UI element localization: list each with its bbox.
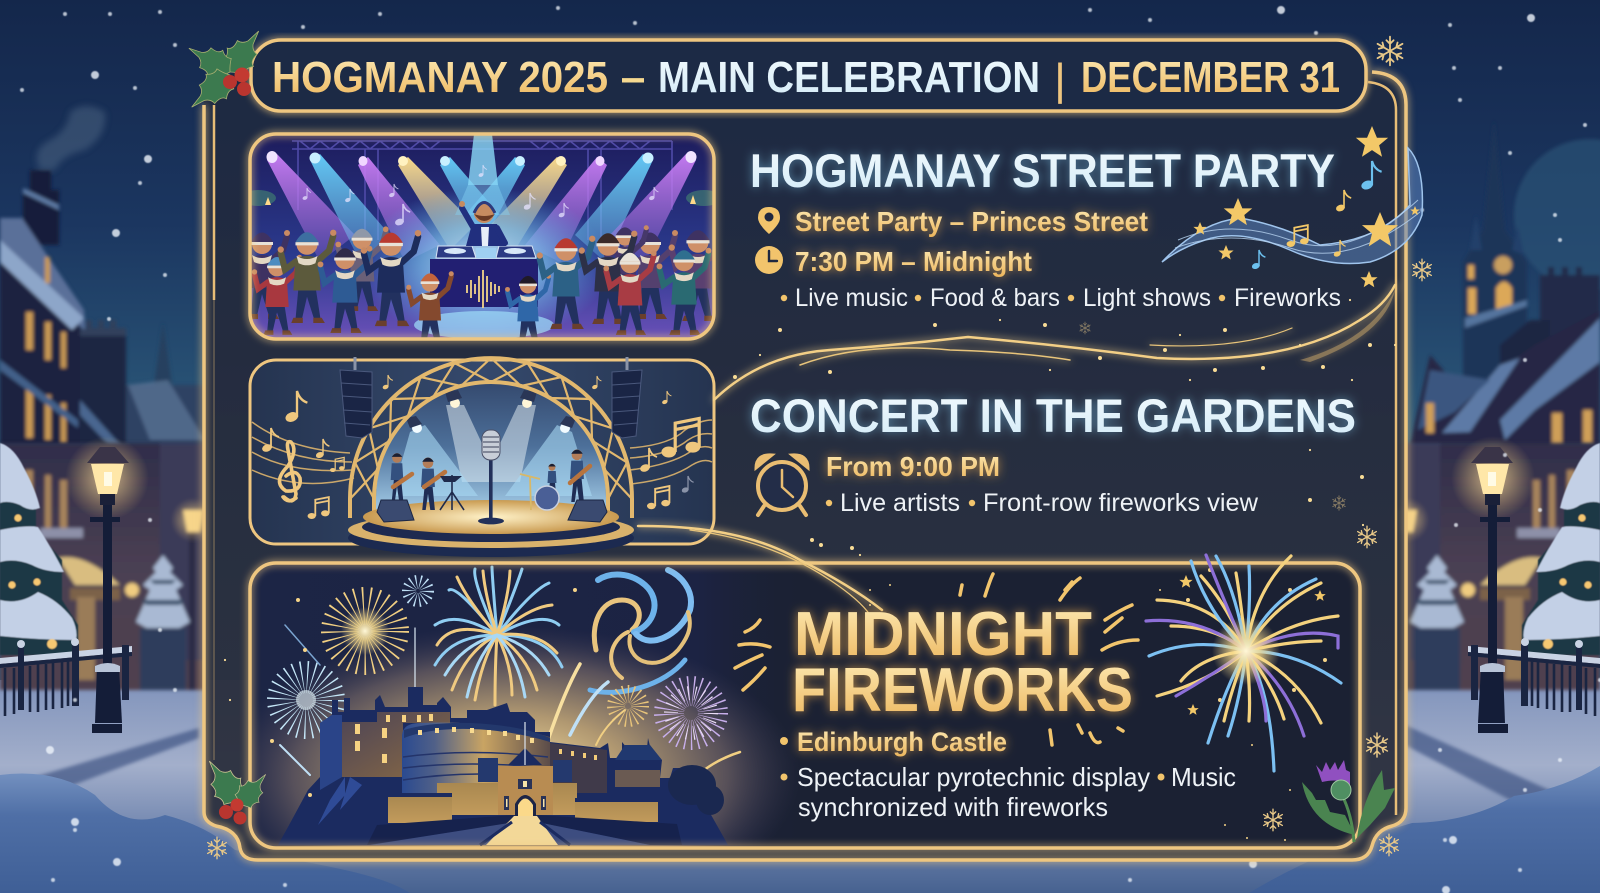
time text: 7:30 PM – Midnight: [795, 246, 1032, 277]
right snow mound: [1249, 766, 1600, 893]
light beams: [267, 134, 696, 343]
title text: DECEMBER 31: [1081, 53, 1340, 102]
location text: Street Party – Princes Street: [795, 206, 1148, 237]
ribbon notes: [1287, 225, 1308, 247]
truss: [350, 358, 632, 518]
castle: [278, 687, 728, 845]
thistle: [1302, 760, 1395, 842]
snowy ground: [0, 680, 1600, 893]
castle silhouette: [278, 687, 728, 845]
speaker stacks: [340, 357, 642, 438]
purple burst: [669, 691, 713, 735]
ramparts and road: [367, 815, 515, 845]
spotlight lamps: [266, 151, 696, 166]
heading midnight fireworks: [792, 600, 1133, 725]
left snow mound: [0, 774, 410, 893]
gold rays around midnight title: [735, 574, 1138, 745]
firework small stars: [1179, 575, 1326, 715]
right townscape: [1410, 120, 1600, 450]
concert features: [826, 489, 1259, 517]
icon: alarm clock: [756, 455, 808, 515]
concert features: Front-row fireworks view: [983, 489, 1259, 517]
panel 3 border: [250, 563, 1360, 848]
snowflake top right: [1376, 37, 1404, 65]
lower walls: [388, 796, 658, 823]
rising rockets: [280, 625, 740, 775]
music ribbon: [1162, 126, 1422, 287]
treble clef: [279, 442, 300, 501]
ribbon stars: [1193, 126, 1420, 287]
spot lamps: [406, 390, 576, 433]
small blue burst: [409, 582, 427, 600]
smoke: [37, 106, 105, 170]
street party features: [781, 284, 1341, 312]
gold burst: [340, 606, 390, 656]
stage platform: [348, 500, 634, 557]
holly top left: [181, 22, 272, 119]
band: [391, 450, 590, 510]
heading concert: CONCERT IN THE GARDENS: [750, 389, 1356, 442]
big firework right: [1146, 555, 1341, 771]
concert time text: From 9:00 PM: [826, 451, 1000, 482]
main panel frame: [204, 72, 1406, 860]
heading midnight fireworks: FIREWORKS: [792, 656, 1133, 725]
left street with tree, fence and lamp: [0, 436, 215, 733]
gold snowflakes: [206, 259, 1433, 859]
title text: [272, 53, 1340, 105]
gatehouse: [437, 783, 577, 815]
torches: [240, 190, 722, 206]
small gold burst: [616, 694, 640, 718]
title text: —: [622, 53, 644, 102]
white blue burst: [283, 677, 329, 723]
dancers: [252, 230, 711, 347]
floating notes: [302, 165, 658, 227]
stage arch: [350, 358, 632, 518]
fireworks description: synchronized with fireworks: [798, 792, 1108, 822]
blue and gold burst: [435, 567, 562, 705]
icon: location pin: [758, 207, 780, 234]
panel 1 border: [250, 134, 714, 339]
panel 3 midnight fireworks: [242, 555, 1368, 856]
left townscape: [0, 106, 210, 462]
gold sparkle dust: [272, 570, 1325, 840]
right house: [615, 770, 660, 787]
gold sparkles: [225, 300, 1395, 700]
panel 1 street party illustration: [234, 134, 727, 347]
gold swoosh between sections: [714, 285, 1395, 400]
street party features: Fireworks: [1234, 284, 1341, 312]
music notes: [261, 375, 700, 519]
curtain wall: [550, 743, 607, 793]
icon: clock: [755, 246, 783, 274]
stage monitors: [377, 500, 607, 522]
back crowd: [234, 225, 727, 321]
street party features: Light shows: [1083, 284, 1211, 312]
DJ: [459, 201, 506, 246]
title text: MAIN CELEBRATION: [658, 53, 1040, 102]
panel 2 concert illustration: [250, 357, 714, 557]
heading street party: HOGMANAY STREET PARTY: [750, 144, 1335, 197]
fireworks description: Spectacular pyrotechnic display: [797, 762, 1150, 792]
gold swoosh to fireworks: [638, 526, 882, 615]
title banner: [251, 40, 1366, 111]
heading midnight fireworks: MIDNIGHT: [794, 600, 1092, 669]
right street with tree, fence and lamp: [1385, 436, 1600, 733]
swirl burst: [590, 570, 691, 692]
DJ booth: [430, 246, 538, 308]
trees by castle: [668, 765, 716, 805]
truss: [292, 141, 672, 240]
round battery: [402, 723, 550, 795]
fireworks description: Music: [1171, 762, 1236, 792]
microphone: [478, 430, 504, 524]
title text: HOGMANAY 2025: [272, 53, 608, 102]
music staves: [252, 420, 712, 484]
street party features: Live music: [795, 284, 908, 312]
fireworks description: [780, 762, 1236, 822]
holly bottom left: [196, 752, 276, 824]
street party features: Food & bars: [930, 284, 1060, 312]
title text: |: [1056, 55, 1064, 105]
concert features: Live artists: [840, 489, 960, 517]
fireworks location: Edinburgh Castle: [797, 727, 1007, 757]
spot beams: [446, 405, 536, 482]
fireworks and castle artwork: [252, 565, 1327, 846]
